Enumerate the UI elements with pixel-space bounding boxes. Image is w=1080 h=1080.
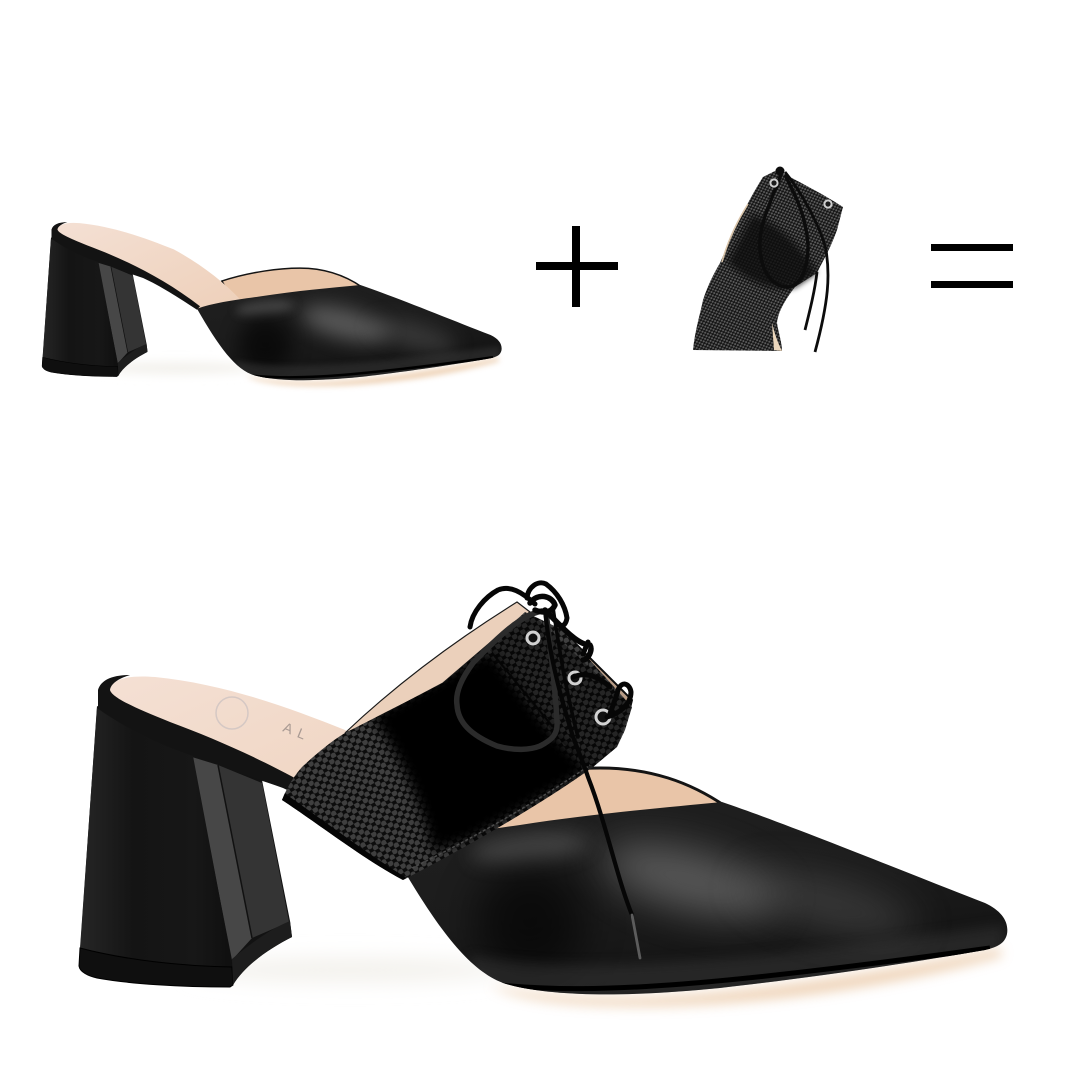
strap [278,612,632,884]
eyelets [527,632,610,724]
lace tip [632,915,640,958]
lace loop [760,172,808,287]
lace ends [785,172,828,352]
equals sign [931,244,1013,288]
insole logo: AL [281,719,314,745]
small lace-up strap accessory [693,166,843,352]
large mule shoe with strap attached [79,583,1007,1006]
insole logo [216,697,314,745]
laces [457,583,640,958]
strap top-right lining edge [552,624,632,708]
plus sign [536,226,618,307]
small black mule shoe [42,222,502,386]
long lace [545,610,632,915]
strap inner lining [345,602,530,733]
eyelets [770,179,778,187]
